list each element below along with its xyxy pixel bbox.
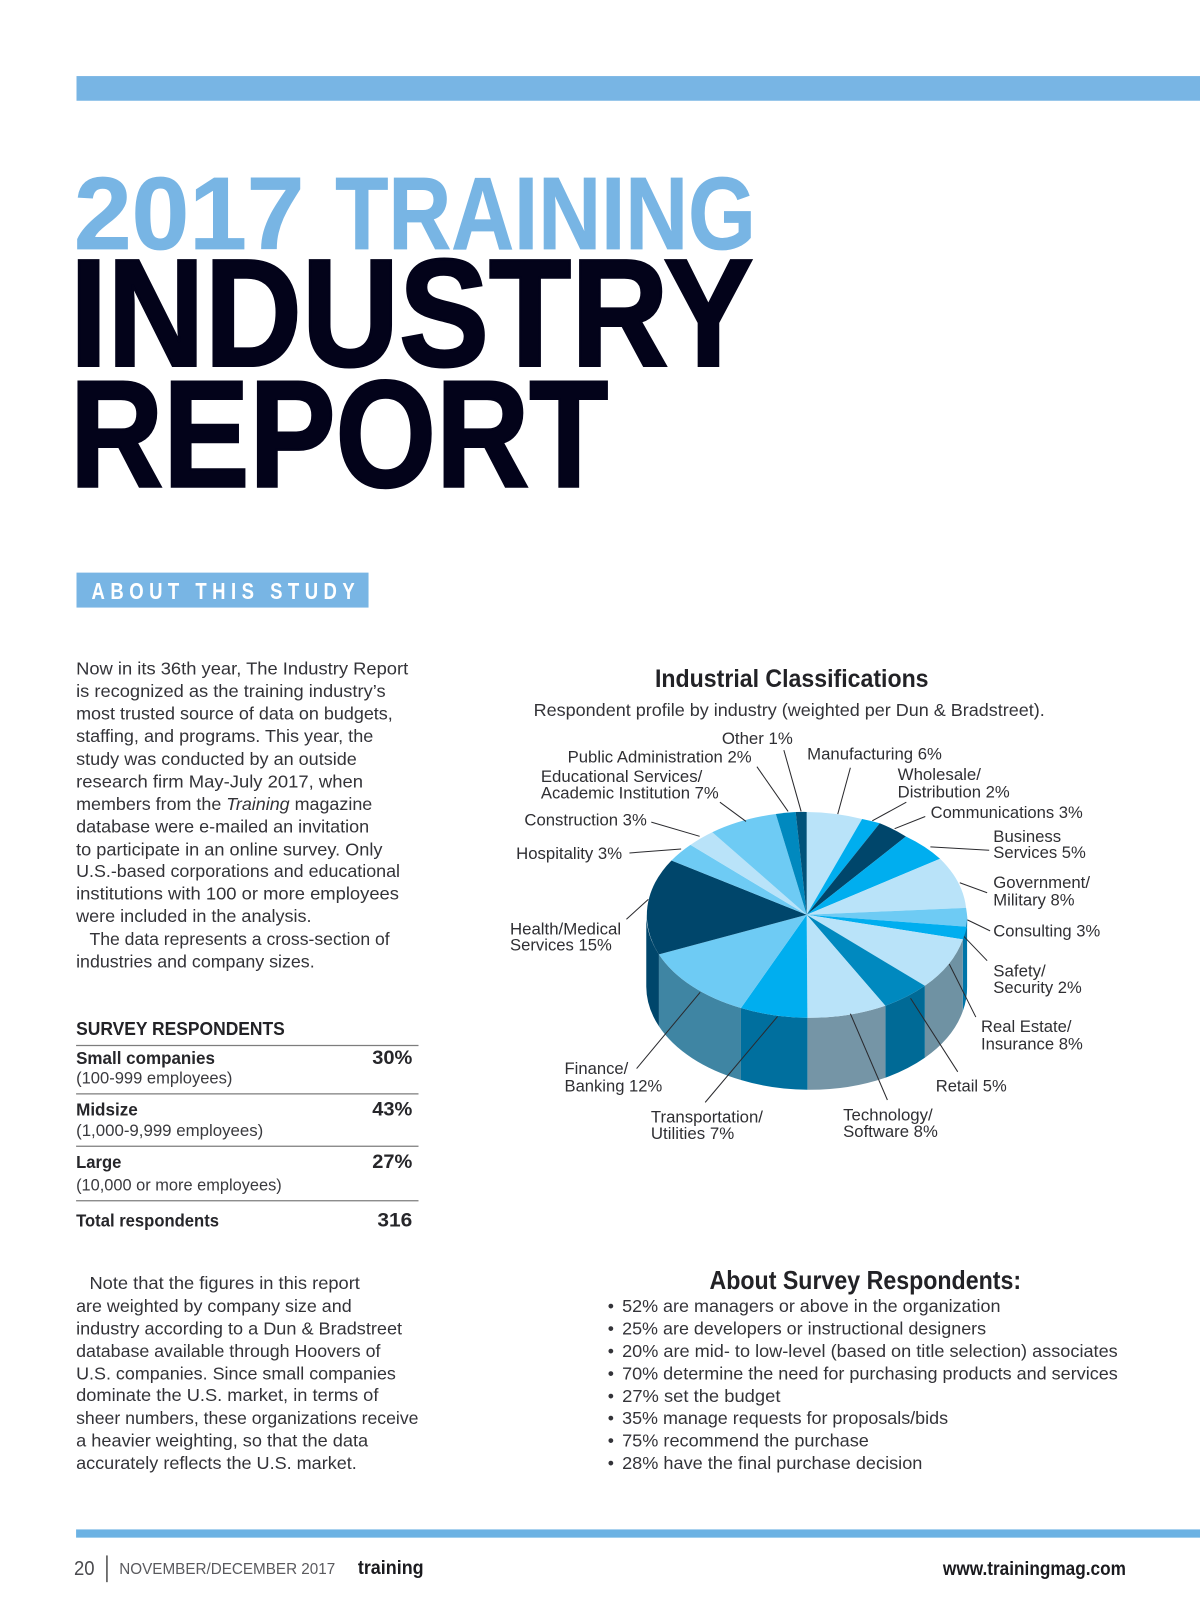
slice: other [796, 812, 807, 915]
bullet list: about survey respondents: • [608, 1296, 614, 1316]
bullet list: about survey respondents: • [608, 1453, 614, 1473]
chart labels: Military 8% [993, 891, 1075, 910]
text block: weighting note: sheer numbers, these organizations receive [76, 1408, 419, 1428]
footer [74, 1555, 1126, 1582]
top accent bar [77, 76, 1200, 101]
heading: about survey respondents: About Survey Respondents: [710, 1267, 1021, 1295]
chart labels: Government/ [993, 873, 1090, 892]
chart labels [510, 729, 1100, 1143]
text block: introduction: were included in the analysis. [75, 906, 312, 926]
row: small companies [76, 1046, 419, 1088]
title: TRAINING [335, 156, 756, 271]
slice: technology [807, 915, 885, 1090]
text block: weighting note: dominate the U.S. market, in terms of [76, 1385, 378, 1405]
text block: weighting note [76, 1273, 419, 1473]
footer: NOVEMBER/DECEMBER 2017 [119, 1561, 335, 1578]
text block: introduction: members from the Training magazine [76, 794, 372, 814]
chart labels: Educational Services/ [541, 767, 703, 786]
title: REPORT [70, 349, 608, 519]
text block: introduction [75, 658, 408, 971]
chart labels: Technology/ [843, 1105, 933, 1124]
chart labels: Communications 3% [931, 803, 1083, 822]
chart labels: Business [993, 827, 1061, 846]
slice: health [646, 860, 807, 1026]
slice: hospitality [671, 845, 807, 915]
row: large [76, 1146, 419, 1194]
chart labels: Safety/ [993, 961, 1046, 980]
chart labels: Utilities 7% [651, 1124, 734, 1143]
bullet list: about survey respondents: 27% set the budget [622, 1386, 781, 1406]
slice: safety [807, 915, 967, 1011]
chart labels: Academic Institution 7% [541, 784, 719, 803]
chart labels: Security 2% [993, 978, 1082, 997]
row: total respondents: 316 [377, 1210, 413, 1231]
leader lines [626, 750, 990, 1102]
row: midsize: (1,000-9,999 employees) [76, 1121, 263, 1140]
chart labels: Consulting 3% [993, 921, 1100, 940]
bullet list: about survey respondents: • [608, 1318, 614, 1338]
text block: weighting note: industry according to a Dun & Bradstreet [76, 1318, 402, 1338]
text block: introduction: most trusted source of data on budgets, [76, 704, 393, 724]
bullet list: about survey respondents: • [608, 1386, 614, 1406]
bullet list: about survey respondents: 75% recommend the purchase [622, 1430, 869, 1450]
bullet list: about survey respondents: 28% have the final purchase decision [622, 1453, 922, 1473]
chart labels: Public Administration 2% [568, 748, 752, 767]
slice: finance [659, 915, 807, 1080]
text block: weighting note: are weighted by company size and [76, 1296, 352, 1316]
slice: government [807, 859, 966, 915]
bullet list: about survey respondents: • [608, 1341, 614, 1361]
text block: weighting note: accurately reflects the U.S. market. [76, 1453, 357, 1473]
text block: introduction: Now in its 36th year, The Industry Report [76, 658, 408, 678]
text block: weighting note: Note that the figures in this report [89, 1273, 360, 1293]
chart labels: Wholesale/ [898, 765, 981, 784]
footer: 20 [74, 1557, 95, 1580]
bottom accent bar [76, 1529, 1200, 1538]
bullet list: about survey respondents: • [608, 1364, 614, 1384]
row: total respondents: Total respondents [76, 1210, 219, 1230]
text block: introduction: The data represents a cross-section of [89, 929, 390, 949]
chart labels: Real Estate/ [981, 1017, 1072, 1036]
title [70, 156, 756, 519]
bullet list: about survey respondents: 70% determine the need for purchasing products and services [622, 1364, 1118, 1384]
footer: training [358, 1558, 424, 1579]
chart labels: Services 15% [510, 936, 612, 955]
chart labels: Insurance 8% [981, 1034, 1083, 1053]
bullet list: about survey respondents: • [608, 1430, 614, 1450]
row: large: 27% [372, 1152, 412, 1173]
row: midsize: 43% [372, 1099, 412, 1120]
chart subtitle: Respondent profile by industry (weighted per Dun & Bradstreet). [534, 700, 1045, 720]
slice: business services [807, 837, 940, 915]
section heading: about this study: ABOUT THIS STUDY [92, 579, 355, 604]
text block: introduction: research firm May-July 2017, when [76, 771, 363, 791]
chart labels: Other 1% [722, 729, 793, 748]
slice: public administration [776, 812, 807, 915]
title: INDUSTRY [70, 228, 753, 399]
slice: retail [807, 915, 925, 1078]
chart labels: Transportation/ [651, 1107, 763, 1126]
text block: weighting note: a heavier weighting, so that the data [76, 1430, 368, 1450]
chart labels: Manufacturing 6% [807, 745, 942, 764]
chart labels: Services 5% [993, 843, 1086, 862]
row: small companies: 30% [372, 1048, 412, 1069]
chart labels: Banking 12% [565, 1077, 662, 1096]
row: large: (10,000 or more employees) [76, 1175, 282, 1194]
row: midsize [76, 1094, 419, 1140]
chart labels: Distribution 2% [898, 783, 1010, 802]
text block: introduction: institutions with 100 or more employees [76, 884, 399, 904]
bullet list: about survey respondents: • [608, 1408, 614, 1428]
chart labels: Health/Medical [510, 919, 621, 938]
slice: consulting [807, 908, 967, 927]
slice: communications [807, 823, 906, 915]
text block: introduction: study was conducted by an outside [76, 749, 357, 769]
slice: wholesale [807, 819, 880, 915]
text block: weighting note: U.S. companies. Since small companies [76, 1364, 396, 1384]
chart labels: Construction 3% [524, 810, 647, 829]
pie chart: industrial classifications [646, 812, 967, 1090]
slice: transportation [741, 915, 807, 1090]
text block: introduction: database were e-mailed an invitation [76, 817, 369, 837]
chart heading: industrial classifications: Industrial Classifications [655, 666, 929, 693]
chart labels: Software 8% [843, 1122, 938, 1141]
bullet list: about survey respondents: 35% manage requests for proposals/bids [622, 1408, 948, 1428]
text block: introduction: U.S.-based corporations and educational [76, 861, 400, 881]
table heading: SURVEY RESPONDENTS [76, 1018, 285, 1039]
bullet list: about survey respondents: 52% are managers or above in the organization [622, 1296, 1001, 1316]
slice: real estate [807, 915, 963, 1058]
text block: weighting note: database available through Hoovers of [76, 1341, 381, 1361]
text block: introduction: to participate in an online survey. Only [76, 839, 383, 859]
text block: introduction: staffing, and programs. This year, the [76, 726, 373, 746]
slice: manufacturing [807, 812, 862, 915]
chart labels: Hospitality 3% [516, 844, 622, 863]
slice: education [712, 814, 807, 915]
bullet list: about survey respondents [608, 1296, 1118, 1473]
footer: www.trainingmag.com [942, 1559, 1126, 1580]
title: 2017 [74, 156, 304, 271]
table: survey respondents [76, 1018, 419, 1231]
bullet list: about survey respondents: 20% are mid- to low-level (based on title selection) associates [622, 1341, 1118, 1361]
row: midsize: Midsize [76, 1099, 138, 1119]
chart labels: Finance/ [565, 1059, 629, 1078]
row: total respondents [76, 1201, 419, 1231]
text block: introduction: is recognized as the training industry’s [76, 681, 386, 701]
row: large: Large [76, 1152, 122, 1172]
bullet list: about survey respondents: 25% are developers or instructional designers [622, 1318, 986, 1338]
section heading: about this study [77, 573, 369, 608]
row: small companies: (100-999 employees) [76, 1069, 232, 1088]
row: small companies: Small companies [76, 1048, 215, 1068]
slice: construction [690, 832, 807, 915]
text block: introduction: industries and company sizes. [76, 951, 315, 971]
chart labels: Retail 5% [936, 1077, 1007, 1096]
